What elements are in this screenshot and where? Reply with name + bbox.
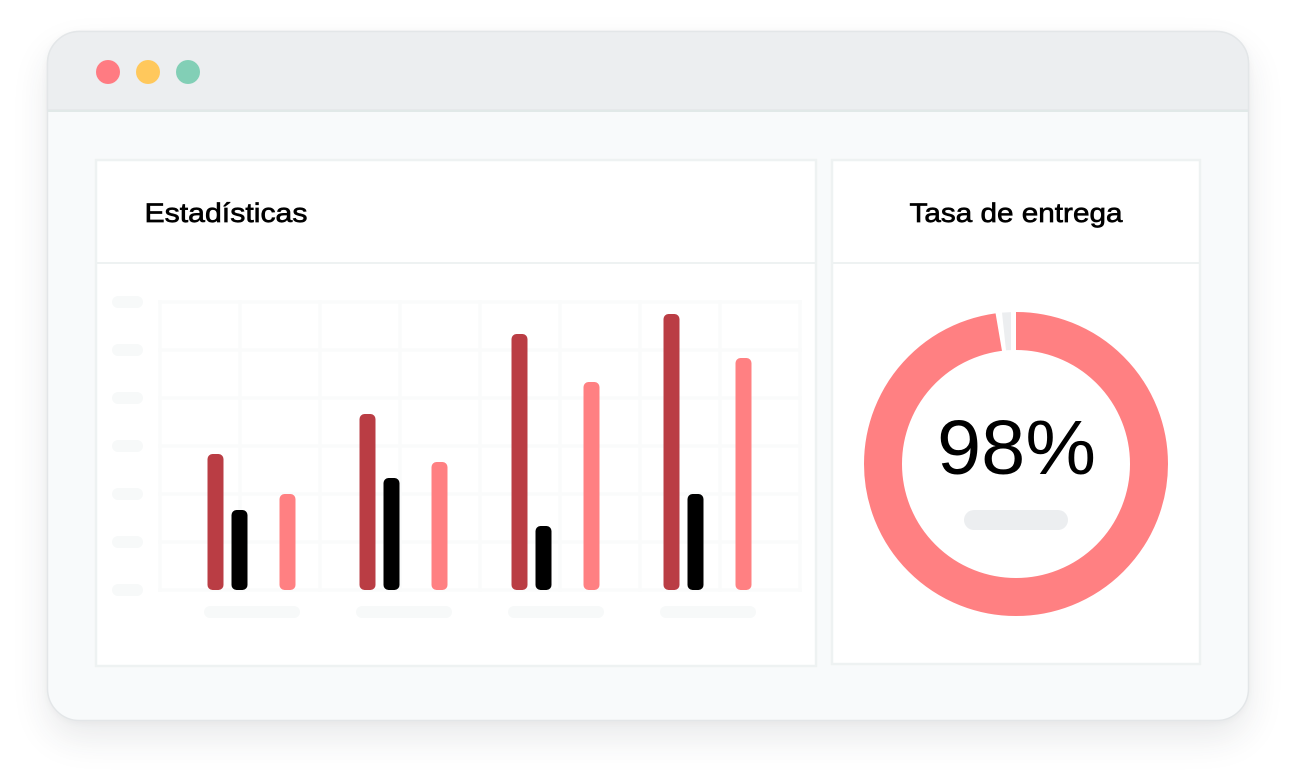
chart x-axis labels placeholder <box>204 606 756 618</box>
bar group 4 <box>664 314 752 590</box>
title bar <box>48 32 1248 112</box>
window control: green dot <box>176 60 200 84</box>
chart grid <box>158 300 802 592</box>
value caption placeholder <box>964 510 1068 530</box>
heading: Tasa de entrega: Tasa de entrega <box>910 198 1123 228</box>
bar group 3 <box>512 334 600 590</box>
donut remainder segment <box>1002 312 1011 350</box>
bar group 2 <box>360 414 448 590</box>
heading: Estadísticas: Estadísticas <box>144 198 308 228</box>
panel: statistics <box>96 160 816 666</box>
window control: yellow dot <box>136 60 160 84</box>
window control: red dot <box>96 60 120 84</box>
chart y-axis labels placeholder <box>112 296 143 596</box>
value: 98%: 98% <box>937 405 1096 491</box>
donut gap <box>995 310 1016 351</box>
donut chart <box>883 310 1149 597</box>
panel: delivery rate <box>832 160 1200 664</box>
bar group 1 <box>208 454 296 590</box>
